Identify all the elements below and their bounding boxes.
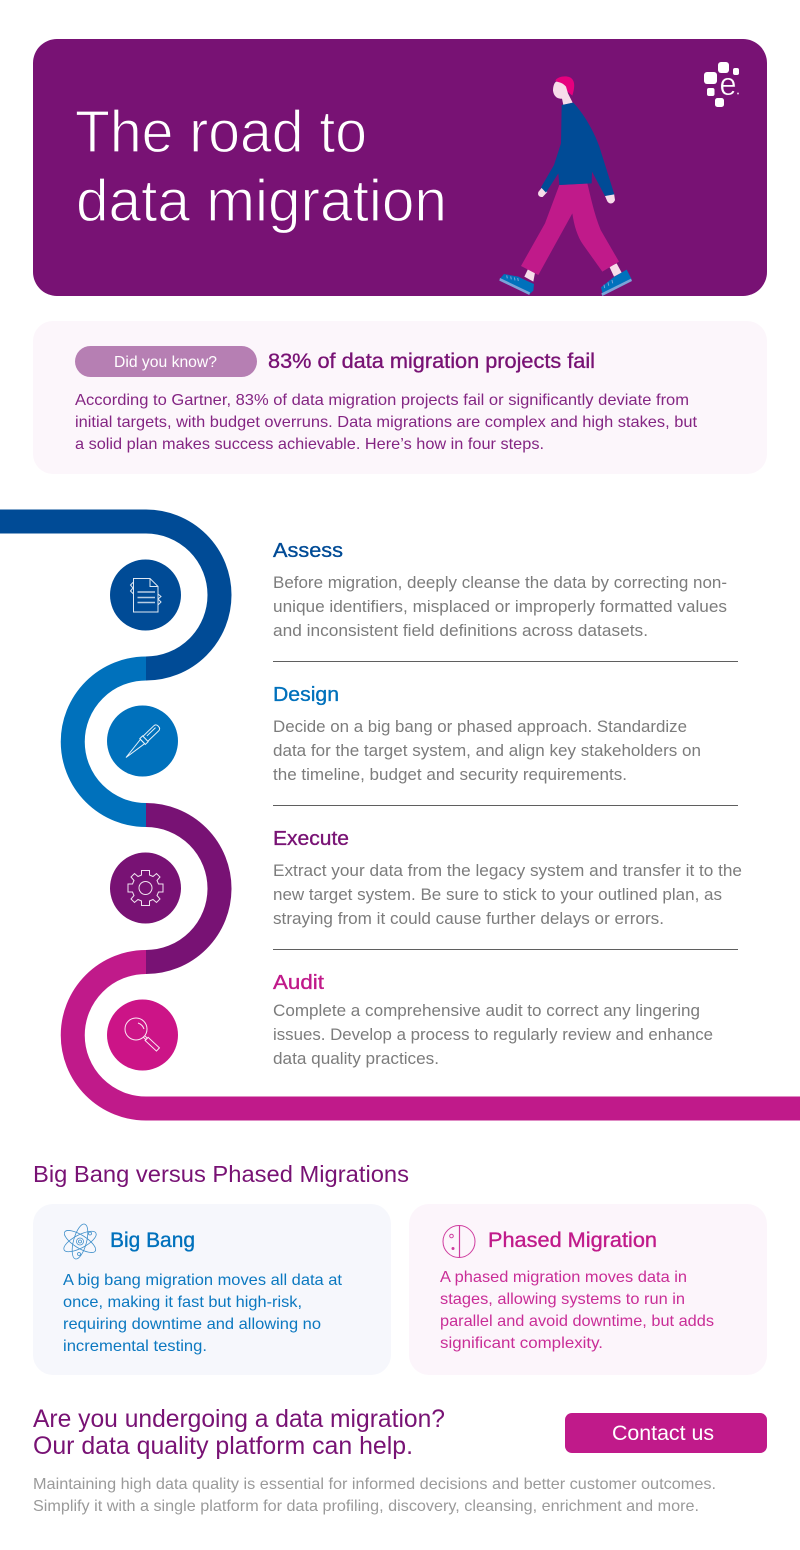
icon: document [110,560,181,630]
step: assess: unique identifiers, misplaced or improperly formatted values [273,597,727,616]
icon: atom [61,1222,99,1261]
text: phased migration description [440,1269,714,1352]
panel: big bang [33,1204,391,1375]
icon: split circle [443,1225,475,1258]
heading: statistic: 83% of data migration projects fail [268,350,595,373]
chart: winding road ribbon [0,522,800,1108]
text: big bang description [63,1272,343,1355]
logo [704,62,739,107]
step: execute: Extract your data from the legacy system and transfer it to the [273,861,742,880]
text: closing paragraph: Maintaining high data quality is essential for informed decisions and better customer outcomes. [33,1476,716,1493]
button: contact us: Contact us [612,1422,714,1445]
text: closing paragraph [33,1476,716,1515]
badge: did you know: Did you know? [114,354,217,371]
step: assess: and inconsistent field definitions across datasets. [273,621,648,640]
step: audit: Audit [273,972,324,994]
heading: call to action [33,1405,445,1460]
badge: did you know [75,346,257,377]
step: execute [273,828,742,928]
title [75,99,447,234]
panel: did you know [33,321,767,474]
title: data migration [76,168,447,234]
icon: magnifying glass [107,1000,178,1070]
text: phased migration description: A phased migration moves data in [440,1269,687,1286]
text: phased migration description: stages, allowing systems to run in [440,1291,685,1308]
step: audit: data quality practices. [273,1049,439,1068]
icon: gear [110,852,181,924]
text: big bang description: requiring downtime and allowing no [63,1316,321,1333]
heading: call to action: Are you undergoing a data migration? [33,1405,445,1433]
heading: phased migration: Phased Migration [488,1229,657,1252]
text: closing paragraph: Simplify it with a single platform for data profiling, discovery, cleansing, enrichment and more. [33,1498,699,1515]
text: big bang description: once, making it fast but high-risk, [63,1294,302,1311]
step: audit: Complete a comprehensive audit to correct any lingering [273,1001,700,1020]
step: design: the timeline, budget and security requirements. [273,765,627,784]
step: design [273,684,701,784]
text: big bang description: incremental testing. [63,1338,207,1355]
text: intro paragraph: a solid plan makes success achievable. Here’s how in four steps. [75,436,544,453]
step: assess: Assess [273,540,343,562]
text: intro paragraph: According to Gartner, 83% of data migration projects fail or significantly deviate from [75,392,689,409]
heading: call to action: Our data quality platform can help. [33,1432,413,1460]
icon: pen [107,706,178,776]
step: execute: new target system. Be sure to stick to your outlined plan, as [273,885,722,904]
step: design: Design [273,684,339,706]
text: intro paragraph: initial targets, with budget overruns. Data migrations are complex and high stakes, but [75,414,698,431]
step: execute: straying from it could cause further delays or errors. [273,909,664,928]
text: intro paragraph [75,392,698,453]
step: audit: issues. Develop a process to regularly review and enhance [273,1025,713,1044]
step: audit [273,972,713,1068]
step: design: Decide on a big bang or phased approach. Standardize [273,717,687,736]
step: assess: Before migration, deeply cleanse the data by correcting non- [273,573,727,592]
title: The road to [75,99,367,165]
heading: comparison section: Big Bang versus Phased Migrations [33,1161,409,1187]
step: assess [273,540,727,640]
panel: hero header [33,39,767,296]
logo: e [720,66,736,102]
step: execute: Execute [273,828,349,850]
illustration: walking person [499,76,632,296]
step: design: data for the target system, and align key stakeholders on [273,741,701,760]
text: phased migration description: parallel and avoid downtime, but adds [440,1313,714,1330]
heading: big bang: Big Bang [110,1229,195,1252]
panel: phased migration [409,1204,767,1375]
button: contact us [565,1413,767,1453]
text: phased migration description: significant complexity. [440,1335,603,1352]
text: big bang description: A big bang migration moves all data at [63,1272,343,1289]
